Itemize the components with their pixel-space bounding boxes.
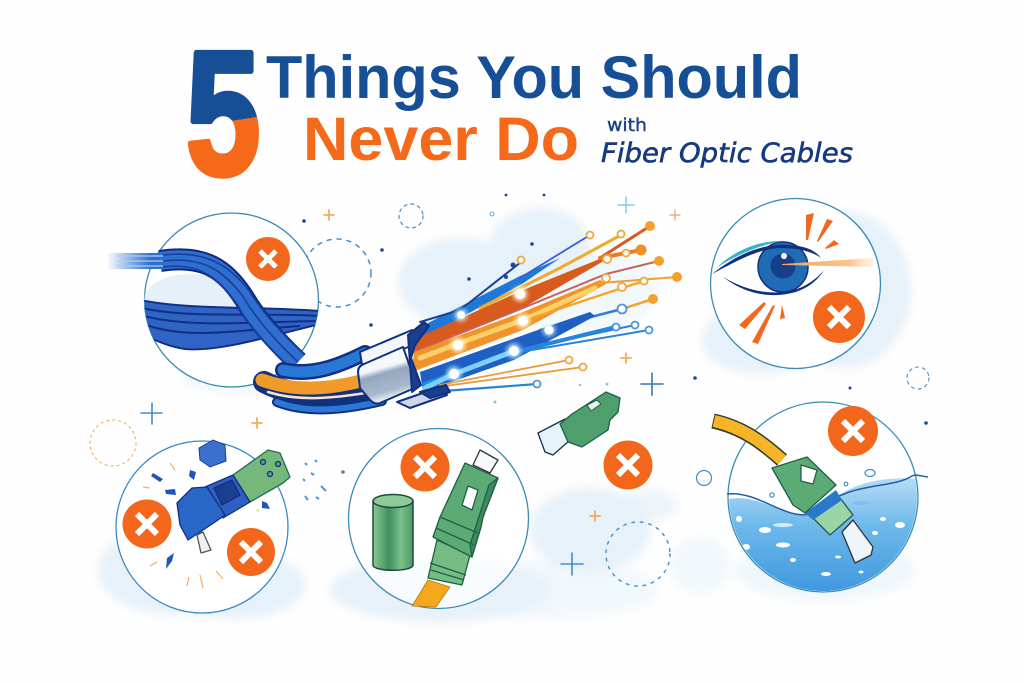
- fiber optic bundle: [262, 221, 682, 409]
- scattered fragments outside circle: [303, 460, 326, 500]
- X badge: [604, 440, 652, 490]
- X badge: [400, 442, 450, 492]
- yellow cable: [713, 421, 782, 460]
- X badge: [246, 237, 290, 281]
- connector: [428, 450, 498, 585]
- background clouds: [98, 208, 915, 622]
- circle outline: [728, 402, 918, 592]
- X badge 2: [227, 528, 275, 576]
- dust cap cylinder: [373, 494, 413, 570]
- heading line 2: Never Do: [303, 105, 579, 173]
- cable clamps: [358, 322, 450, 408]
- debris sparks: [143, 463, 259, 588]
- debris: [151, 470, 270, 569]
- big numeral 5: 5: [186, 15, 260, 212]
- yellow cable: [412, 580, 450, 607]
- cloud in circle: [144, 274, 235, 307]
- X badge: [828, 406, 878, 456]
- cable trunk: [262, 353, 382, 409]
- ring end nodes: [518, 230, 652, 388]
- laser beam: [782, 258, 873, 267]
- connector: [772, 457, 873, 563]
- title: [186, 15, 853, 212]
- pain rays: [739, 213, 839, 344]
- circle outline: [348, 428, 528, 608]
- panel: eye: [710, 198, 880, 368]
- panel: broken connector: [116, 440, 326, 613]
- water surface line: [727, 475, 928, 515]
- circle outline: [710, 198, 880, 368]
- X badge 1: [122, 500, 172, 548]
- panel: water: [696, 402, 928, 600]
- glowing nodes: [447, 287, 555, 381]
- eye: [712, 241, 824, 295]
- connector: [177, 450, 290, 553]
- heading line 1: Things You Should: [266, 44, 802, 111]
- decorative dashed circles: [90, 204, 929, 586]
- water: [729, 478, 917, 591]
- panel: tangled cable: [107, 213, 320, 387]
- with label: with: [607, 115, 647, 136]
- subtitle: Fiber Optic Cables: [601, 138, 853, 169]
- decorative plus signs: [141, 197, 680, 575]
- broken off cube: [199, 440, 226, 467]
- lower cable bundle: [140, 300, 320, 349]
- circle outline: [144, 213, 318, 387]
- bubbles: [696, 470, 875, 497]
- X badge: [813, 291, 865, 343]
- circle outline: [116, 441, 288, 613]
- upper kinked cable: [107, 253, 304, 368]
- decorative dots: [302, 194, 928, 474]
- green connector: [538, 392, 620, 455]
- solid orange end nodes: [636, 221, 682, 304]
- fiber strands: [412, 226, 677, 392]
- panel: dust cap: [348, 428, 528, 608]
